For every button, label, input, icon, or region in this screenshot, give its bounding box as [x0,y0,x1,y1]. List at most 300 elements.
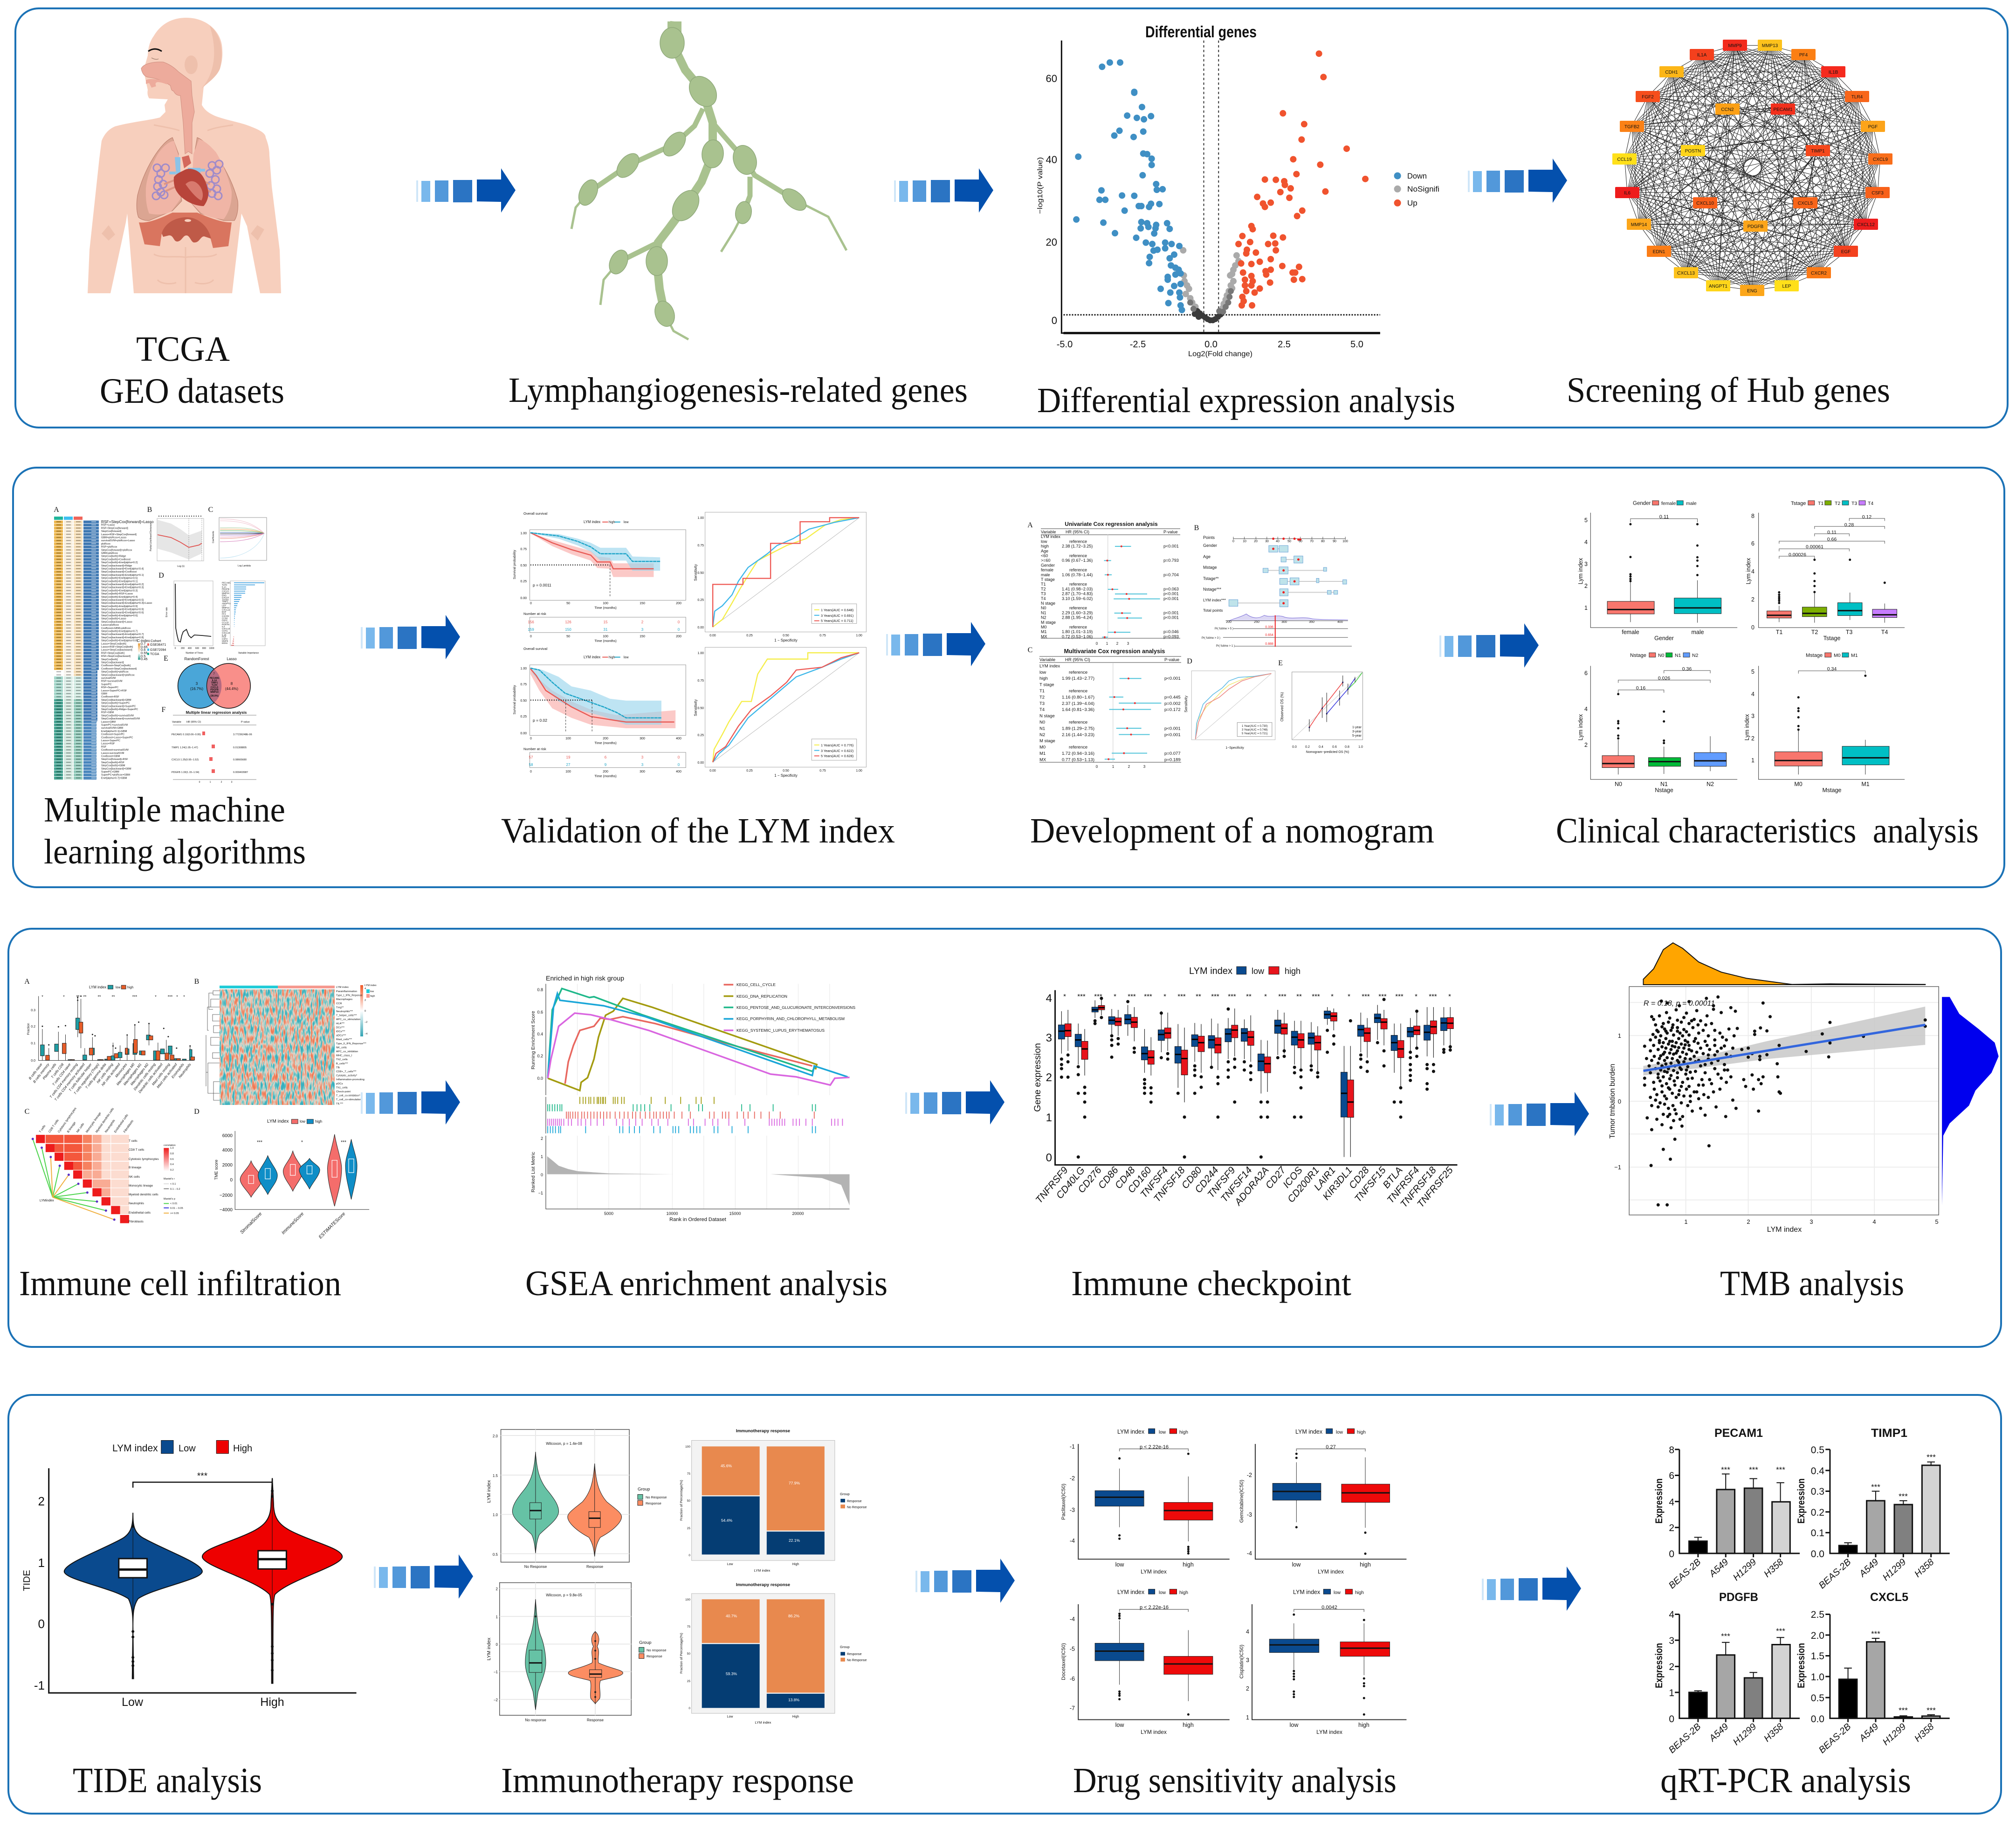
chart: variable importance bars: CCL19 [222,621,229,623]
table: univariate Cox regression forest plot: M0 [1041,625,1047,629]
table: univariate Cox regression forest plot: N0 [1041,606,1046,610]
heatmap row labels: RSF+StepCox[forward] [101,527,128,530]
chart: immune cell fraction boxplots: Macrophages M1 [123,1063,143,1086]
chart: survival curve cohort 2: 300 [640,737,645,740]
table: univariate Cox regression forest plot: 1.41 (0.98−2.03) [1062,587,1093,591]
chart: stacked response bars 2: Group [840,1645,850,1649]
significance stars: *** [1144,993,1152,1001]
arrow 6 [1439,623,1539,668]
GSEA legend: KEGG_PORPHYRIN_AND_CHLOROPHYLL_METABOLISM [736,1016,845,1021]
axis labels: −log10(P value) [1036,157,1044,214]
chart: survival curve cohort 2: Survival probability [512,685,516,714]
sub-figure letters [54,506,213,714]
chart: lasso cross validation: Partial Likelihood Deviance [150,523,152,551]
chart: TMB scatter with marginal densities: 0 [1618,1098,1621,1105]
chart: PDGFB bars: Expression [1654,1643,1665,1688]
chart: Docetaxel boxplot: high [1183,1722,1194,1728]
chart: immune cell fraction boxplots: ** [83,994,87,999]
network nodes: CXCL13 [1677,271,1695,276]
heatmap row labels: plsRcox [101,543,110,545]
chart: TIDE violin: LYM index [112,1443,158,1454]
chart: survival curve cohort 1: 100 [603,602,608,605]
chart: immunotherapy violin 1: 0.5 [493,1553,498,1557]
chart: TIMP1 bars: *** [1871,1483,1880,1491]
gene labels: CD48 [1113,1165,1137,1191]
chart: stacked response bars 1: Low [727,1563,733,1566]
chart: lasso coefficients [212,518,267,567]
chart: immune cell fraction boxplots: * [183,994,185,999]
chart: correlation triangle with LYM index links: Mantel's p [164,1198,175,1201]
chart: immune signature heatmap: −4 [365,1033,367,1035]
chart: nomogram: LYM index*** [1203,598,1226,602]
table: univariate Cox regression forest plot: 2.88 (1.95−4.24) [1062,615,1093,620]
heatmap row labels: survivalSVM [101,677,116,680]
heatmap row labels: RSF+plsRcox [101,546,117,549]
chart: M stage boxplot: Lym index [1744,714,1750,740]
chart: ROC curve cohort 2: 3 Years(AUC = 0.622) [821,749,853,753]
chart: immunotherapy violin 2: 1 [496,1615,498,1619]
heatmap row labels: StepCox[backward]+GBM [101,699,131,702]
chart: ROC curve cohort 2 [694,647,866,778]
heatmap row labels: RSF+StepCox[both] [101,652,124,655]
table: multivariate Cox regression forest plot: MX [1039,757,1046,762]
chart: N stage boxplot: N0 [1658,653,1665,658]
chart: Paclitaxel boxplot: high [1183,1561,1194,1568]
chart: immune cell fraction boxplots: Eosinophils [171,1062,185,1079]
axis labels: -2.5 [1130,339,1146,350]
heatmap row labels: StepCox[backward]+GBM [101,767,131,770]
chart: TME score violins: D [194,1108,200,1116]
heatmap row labels: StepCox[backward]+Enet[alpha=0.1] [101,574,144,577]
chart: PECAM1 bars [1654,1427,1800,1591]
chart: stacked response bars 2: 25 [687,1680,690,1683]
chart: Gemcitabine boxplot: low [1292,1561,1301,1568]
chart: immunotherapy violin 2: −2 [494,1698,498,1702]
chart: immune cell fraction boxplots: Fraction [27,1023,30,1035]
chart: Docetaxel boxplot: LYM index [1141,1729,1167,1735]
heatmap row labels: StepCox[forward] [101,530,122,533]
significance stars: * [1348,993,1350,1001]
chart: immune cell fraction boxplots: Monocytes [114,1063,128,1078]
chart: correlation triangle with LYM index links: CD8 T cells [129,1148,144,1152]
sub-figure letters: F [162,706,166,714]
chart: immune cell fraction boxplots: * [41,994,43,999]
chart: correlation triangle with LYM index links: 0.8 [170,1153,174,1155]
table: univariate Cox regression forest plot: p=0.093 [1163,634,1179,639]
heatmap row labels: Lasso+SuperPC+RSF [101,690,127,692]
heatmap row labels: Mast_cells*** [336,1038,352,1041]
chart: Gender boxplot: female [1622,629,1639,635]
table: multiple linear regression: 0.08665680 [233,759,247,761]
chart: stacked response bars 2: Response [847,1653,862,1656]
table: univariate Cox regression forest plot: p=0.063 [1163,587,1179,591]
chart: immune cell fraction boxplots: * [176,994,178,999]
table: multivariate Cox regression forest plot: 1.72 (0.94−3.16) [1062,751,1094,756]
table: univariate Cox regression forest plot: 0 [1096,642,1098,646]
table: univariate Cox regression forest plot: N1 [1041,610,1046,615]
heatmap row labels: SuperPC+plsRcox+GBM [101,774,130,777]
chart: Docetaxel boxplot: low [1115,1722,1124,1728]
table: univariate Cox regression forest plot: Age [1041,549,1048,553]
chart: T stage boxplot: 0.28 [1844,522,1854,528]
network nodes: CSF3 [1872,191,1884,196]
table: multivariate Cox regression forest plot: C [1028,646,1032,654]
chart: immunotherapy violin 1: Response [646,1501,661,1505]
network nodes: CXCL9 [1873,157,1888,162]
heatmap row labels: StepCox[both]+CoxBoost [101,558,131,561]
gene labels: CD27 [1264,1164,1288,1191]
chart: nomogram: 20 [1254,540,1258,543]
chart: nomogram: 0.888 [1265,642,1273,646]
risk table numbers: 0 [678,763,680,767]
risk table numbers: 58 [529,763,533,767]
chart: variable importance bars: CXCL9 [222,596,229,599]
chart: survival curve cohort 2 [512,647,686,778]
table: univariate Cox regression forest plot: 3.10 (1.59−6.02) [1062,596,1093,601]
heatmap legend: C-index and cohort: 0.5 [141,654,145,658]
chart: survival curve cohort 2: Time (months) [594,741,617,745]
chart: calibration curve [1278,659,1363,754]
risk table numbers: 6 [605,755,607,759]
arrow 4 [361,615,460,659]
chart: T stage boxplot: T1 [1818,501,1823,506]
heatmap row labels: StepCox[both]+Ridge [101,555,126,558]
table: univariate Cox regression forest plot: p<0.001 [1163,610,1179,615]
chart: correlation triangle with LYM index links: NK cells [129,1175,140,1179]
significance stars: *** [1077,993,1086,1001]
heatmap legend: C-index and cohort: 0.65 [141,645,148,649]
chart: Gemcitabine boxplot: LYM index [1295,1429,1323,1435]
chart: correlation triangle with LYM index links: Fibroblasts [123,1119,134,1133]
chart: TME score violins: −2000 [220,1193,233,1198]
table: univariate Cox regression forest plot: female [1041,568,1053,573]
chart: immune cell fraction boxplots: Dendritic cells activated [138,1062,164,1094]
chart: ROC curve cohort 1: 3 Years(AUC = 0.691) [821,614,853,618]
top density [1644,943,1925,985]
heatmap row labels: StepCox[backward]+Enet[alpha=0.8] [101,636,144,639]
chart: correlation triangle with LYM index links: Endothelial cells [129,1211,151,1215]
chart: PDGFB bars: *** [1721,1632,1730,1641]
chart: correlation triangle with LYM index links: < 0.01 [170,1202,177,1205]
chart: immune cell fraction boxplots: NK cells activated [101,1062,121,1087]
arrow 7 [361,1080,460,1125]
heatmap row labels: T_cell_co-stimulation* [336,1098,363,1101]
chart: variable importance bars: TLR4 [222,584,227,586]
heatmap row labels: SuperPC+GBM [101,771,119,773]
chart: immune cell fraction boxplots: 0.1 [31,1042,35,1045]
chart: GSEA running enrichment plot: 0.4 [537,1032,543,1036]
chart: CXCL5 bars: H1299 [1881,1721,1908,1747]
axis labels: 40 [1046,154,1057,166]
chart: ROC curve cohort 2: 0.25 [697,734,704,737]
panel: modelling and clinical validation [13,468,2004,887]
chart: immune cell fraction boxplots: T cells CD4 memory activated [54,1062,86,1102]
table: multivariate Cox regression forest plot: 1.64 (0.81−3.36) [1062,707,1094,712]
chart: ROC curve cohort 1: 0.25 [746,634,753,637]
chart: Paclitaxel boxplot: p < 2.22e-16 [1140,1444,1169,1450]
chart: N stage boxplot: 0.026 [1658,676,1670,681]
chart: TME score violins: *** [341,1140,346,1145]
chart: survival curve cohort 2: low [624,656,629,659]
gene labels: CD200R1 [1286,1165,1321,1205]
arrow 12 [1482,1567,1581,1611]
chart: survival curve cohort 2: Overall survival [523,647,548,651]
chart: nomogram: 300 [1281,621,1287,624]
chart: Gemcitabine boxplot: -3 [1247,1511,1252,1518]
table: multivariate Cox regression forest plot: 2.16 (1.44−3.23) [1062,732,1094,738]
chart: calibration curve: 0.2 [1305,745,1310,749]
heatmap row labels: MHC_class_I [336,1055,352,1057]
chart: CXCL5 bars [1796,1591,1950,1755]
heatmap row labels: Lasso+StepCox[both] [101,642,126,645]
chart: N stage boxplot: N2 [1692,653,1699,658]
chart: stacked response bars 2: High [792,1715,799,1718]
chart: nomogram: Pr( futime > 1 ) [1216,645,1235,648]
chart: T stage boxplot: T1 [1776,629,1782,635]
heatmap row labels: pDCs [336,1083,343,1085]
chart: TME score violins: TME score [214,1159,219,1180]
heatmap row labels: StepCox[backward]+Lasso [101,621,132,623]
chart: M stage boxplot: 5 [1751,669,1755,675]
chart: Docetaxel boxplot: Docetaxel(IC50) [1061,1643,1066,1680]
chart: immune cell fraction boxplots: Neutrophils [178,1062,192,1079]
chart: correlation triangle with LYM index links: 0.4 [170,1163,174,1166]
chart: PECAM1 bars: 6 [1669,1470,1674,1481]
right density [1942,997,1999,1206]
chart: TIMP1 bars: 0.5 [1811,1445,1824,1456]
chart: immunotherapy violin 2: No response [525,1718,546,1722]
chart: TIDE violin: TIDE [22,1570,32,1591]
heatmap legend: C-index and cohort: 0.6 [141,648,145,652]
chart: PECAM1 bars: BEAS-2B [1667,1557,1703,1591]
chart: M stage boxplot: M1 [1851,653,1858,658]
gene labels: TNFRSF4 [1385,1165,1422,1206]
chart: Gender boxplot [1577,501,1737,642]
chart: correlation triangle with LYM index links: Neutrophils [104,1119,116,1133]
chart: M stage boxplot: Mstage [1823,787,1842,794]
network nodes: CCL19 [1617,157,1632,162]
table: multivariate Cox regression forest plot: p=0.445 [1164,695,1181,700]
chart: TIDE violin: High [260,1696,284,1709]
chart: immune signature heatmap: 2 [365,999,366,1002]
chart: survival curve cohort 1: Number at risk [523,612,546,616]
chart: ROC curve cohort 1: 0.75 [819,634,826,637]
chart: N stage boxplot: Nstage [1655,787,1673,794]
chart: ROC curve cohort 2: 0.75 [697,679,704,683]
gene labels: TNFRSF18 [1398,1165,1438,1210]
risk table numbers: 100 [603,635,608,638]
heading: nomogram: Development of a nomogram [1030,811,1434,850]
risk table numbers: 3 [641,763,644,767]
chart: TMB scatter with marginal densities: 1 [1684,1218,1688,1225]
significance stars: * [1331,993,1334,1001]
chart: survival curve cohort 2: high [609,656,615,659]
chart: stacked response bars 1: 25 [687,1527,690,1530]
risk table numbers: 0 [678,755,680,759]
table: univariate Cox regression forest plot: Gender [1041,563,1055,567]
chart: TIDE violin: *** [197,1471,208,1481]
chart: TME score violins [194,1108,369,1240]
heatmap row labels: LYM index [336,986,349,989]
chart: M stage boxplot: 0.34 [1827,666,1837,672]
table: multivariate Cox regression forest plot: 1 [1112,765,1115,769]
table: univariate Cox regression forest plot: T1 [1041,582,1046,587]
sub-figure letters: E [164,655,168,663]
chart: TIDE violin: Low [122,1696,144,1709]
chart: variable importance bars: ANGPT1 [222,602,231,605]
risk table numbers: 27 [566,763,571,767]
chart: venn diagram: 8 [231,682,233,686]
chart: immune cell fraction boxplots: A [24,978,30,986]
chart: immune cell fraction boxplots: *** [168,994,173,999]
table: multivariate Cox regression forest plot: N stage [1039,714,1055,719]
chart: nomogram: 30 [1265,540,1269,543]
chart: stacked response bars 2: 100 [685,1598,690,1601]
heatmap row labels: T_cell_co-inhibition* [336,1095,361,1097]
chart: PDGFB bars: H1299 [1731,1721,1758,1747]
chart: Cisplatin boxplot: LYM index [1293,1589,1321,1595]
chart: stacked response bars 1 [679,1429,867,1573]
heatmap row labels: Lasso+survivalSVM [101,752,124,755]
chart: variable importance bars: POSTN [222,623,229,626]
chart: stacked response bars 2: 50 [687,1652,690,1656]
chart: TIMP1 bars: TIMP1 [1871,1427,1907,1440]
heading: immune checkpoint: Immune checkpoint [1071,1264,1351,1303]
chart: Gender boxplot: 4 [1584,539,1588,545]
table: multivariate Cox regression forest plot: M stage [1039,738,1055,744]
chart: ROC curve cohort 1: 0.25 [697,599,704,602]
heatmap row labels: StepCox[both]+Ridge+SuperPC [101,708,138,711]
table: multivariate Cox regression forest plot: T2 [1039,695,1045,700]
chart: Docetaxel boxplot: -6 [1070,1676,1075,1682]
chart: venn diagram: TLR4 [212,684,217,687]
chart: calibration curve: Nomogram−predicted OS (%) [1306,751,1349,754]
network nodes: PECAM1 [1773,107,1793,112]
chart: TIMP1 bars: *** [1899,1492,1908,1501]
significance stars: *** [1429,993,1437,1001]
chart: correlation triangle with LYM index links: LYMindex [40,1199,54,1202]
heatmap row labels: StepCox[backward]+Enet[alpha=0.2] [101,583,144,586]
chart: Gemcitabine boxplot: -4 [1247,1550,1252,1557]
chart: random forest error curve: 0 [175,647,176,650]
chart: variable importance bars: FGF2 [222,619,227,621]
gene labels: CD40LG [1054,1165,1087,1201]
chart: immunotherapy violin 1: Response [586,1565,604,1569]
gene labels: CD86 [1096,1165,1121,1191]
chart: variable importance bars: PDGFB [222,588,229,590]
chart: stacked response bars 1: 50 [687,1499,690,1503]
heading: qRT-PCR: qRT-PCR analysis [1660,1761,1911,1800]
network nodes: ANGPT1 [1709,284,1727,289]
heatmap legend: C-index and cohort: TCGA [150,653,159,656]
chart: Cisplatin boxplot: 1 [1246,1714,1249,1721]
heading: lymphangiogenesis: Lymphangiogenesis-related genes [509,371,968,410]
chart: survival curve cohort 2: 0.00 [520,732,527,735]
table: multiple linear regression: PECAM1 0.10(0.06−0.95) [172,733,201,736]
risk table numbers: 150 [565,628,571,632]
figure: machine learning C-index heatmap [54,517,166,780]
chart: correlation triangle with LYM index links: 0.6 [170,1158,174,1161]
chart: PECAM1 bars: H1299 [1731,1557,1758,1583]
chart: PDGFB bars: 1 [1669,1688,1674,1698]
sub-figure letters: D [158,572,164,580]
gene labels: TNFSF15 [1353,1165,1388,1204]
heatmap row labels: StepCox[both]+Enet[alpha=0.6] [101,614,138,617]
chart: correlation triangle with LYM index links: Cytotoxic lymphocytes [57,1107,77,1133]
heatmap row labels: DCs*** [336,1026,345,1029]
chart: PDGFB bars [1654,1591,1800,1755]
chart: Cisplatin boxplot: high [1355,1590,1364,1595]
heatmap row labels: StepCox[backward]+Ridge [101,565,132,567]
chart: TIDE violin [22,1441,357,1709]
chart: Gender boxplot: Gender [1633,501,1651,506]
heatmap row labels: Lasso+plsRcox [101,624,119,627]
chart: survival curve cohort 2: 0.25 [520,715,527,718]
chart: TME score violins: 2000 [222,1163,233,1168]
chart: ROC curve cohort 2: 0.25 [746,769,753,773]
heatmap row labels: RSF+GBM [101,711,114,714]
chart: immune signature heatmap: B [194,978,199,986]
chart: immune cell fraction boxplots: 0.2 [31,1025,35,1028]
heatmap row labels: TIL*** [336,1103,344,1105]
chart: nomogram: 10 [1243,540,1246,543]
chart: immune signature heatmap: 0 [365,1010,366,1013]
chart: TMB scatter with marginal densities: R = 0.18, p = 0.00011 [1644,1000,1715,1008]
chart: calibration curve: Observed OS (%) [1280,692,1284,722]
chart: nomogram: Nstage*** [1203,587,1222,592]
heatmap row labels: Neutrophils*** [336,1010,353,1013]
arrow 1 [416,168,516,213]
chart: M stage boxplot: M0 [1834,653,1841,658]
chart: stacked response bars 2: 86.2% [788,1614,799,1618]
chart: T stage boxplot: Tstage [1791,501,1806,506]
chart: Cisplatin boxplot: low [1334,1590,1341,1595]
network nodes: CXCL12 [1857,222,1875,228]
chart: Gemcitabine boxplot: high [1357,1430,1366,1435]
heatmap legend: C-index and cohort: Cohort [151,639,161,643]
chart: TIMP1 bars [1796,1427,1950,1591]
chart: ROC curve cohort 2: 0.50 [697,707,704,710]
table: univariate Cox regression forest plot: 1.80 (1.01−3.19) [1062,629,1093,634]
chart: correlation triangle with LYM index links: Myeloid dendritic cells [129,1193,158,1196]
chart: variable importance bars: MMP14 [222,592,229,594]
chart: CXCL5 bars: 0.0 [1811,1714,1824,1725]
chart: CXCL5 bars: *** [1927,1706,1936,1715]
chart: PDGFB bars: 2 [1669,1662,1674,1672]
gene labels: CD80 [1180,1165,1204,1191]
chart: Docetaxel boxplot: low [1159,1590,1166,1595]
chart: immunotherapy violin 1 [486,1429,667,1569]
chart: GSEA running enrichment plot: 1 [541,1154,543,1159]
heatmap row labels: StepCox[backward]+Enet[alpha=0.9] [101,608,144,611]
chart: Gender boxplot: 0.11 [1659,514,1669,520]
chart: ROC curve cohort 1 [694,512,866,642]
heatmap row labels: CoxBoost+Lasso+SuperPC [101,736,133,739]
chart: correlation triangle with LYM index links: Monocytic lineage [129,1184,153,1187]
gene labels [1033,1164,1455,1210]
chart: Cisplatin boxplot: low [1290,1722,1299,1728]
chart: calibration curve: 1.0 [1358,745,1363,749]
axis labels: 20 [1046,236,1057,248]
chart: nomogram [1194,524,1352,648]
chart: immunotherapy violin 1: No Response [646,1495,667,1499]
gene labels: TNFRSF9 [1033,1165,1070,1206]
network nodes: EDN1 [1653,249,1665,255]
chart: random forest error curve: 200 [181,647,185,650]
chart: TIMP1 bars: H1299 [1881,1557,1908,1583]
arrow 9 [1490,1092,1589,1136]
chart: immune cell fraction boxplots: 0.0 [31,1059,35,1063]
